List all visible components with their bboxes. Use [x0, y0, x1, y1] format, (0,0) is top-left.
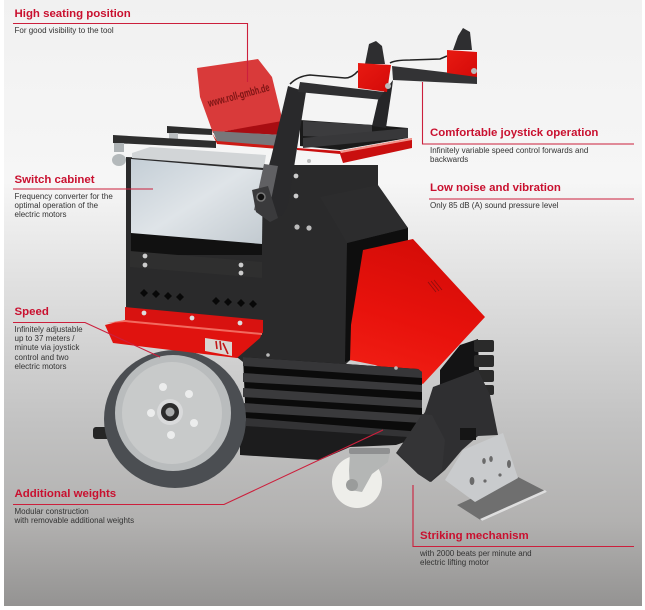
bolts on plates	[266, 353, 398, 370]
callout: speed: control and two	[14, 353, 69, 362]
callout: low noise and vibration: Only 85 dB (A) sound pressure level	[430, 201, 559, 210]
callout: speed: minute via joystick	[14, 343, 80, 352]
callout: comfortable joystick operation	[422, 82, 634, 164]
callout: high seating position: For good visibility to the tool	[14, 26, 114, 35]
callout: speed: Infinitely adjustable	[14, 325, 83, 334]
callout: striking mechanism: with 2000 beats per minute and	[419, 549, 532, 558]
seat support arm	[252, 86, 311, 222]
callout: speed	[13, 306, 160, 371]
callout: comfortable joystick operation: Infinitely variable speed control forwards and	[430, 146, 588, 155]
callout: low noise and vibration: Low noise and vibration	[430, 182, 561, 194]
lower chassis	[240, 420, 422, 460]
callout: comfortable joystick operation: backwards	[430, 155, 468, 164]
rear stacked weights	[440, 339, 494, 400]
callout: switch cabinet: optimal operation of the	[14, 201, 99, 210]
callout: striking mechanism	[413, 485, 634, 567]
callout: speed: electric motors	[14, 362, 67, 371]
side handle	[93, 427, 111, 439]
callout: additional weights	[13, 430, 383, 525]
red motor housing	[350, 239, 485, 384]
rear frame	[396, 370, 498, 482]
main black body	[126, 157, 408, 365]
callout: high seating position: High seating position	[14, 8, 131, 20]
callout: striking mechanism: Striking mechanism	[420, 530, 529, 542]
machine illustration	[93, 28, 547, 521]
callout: additional weights: Additional weights	[14, 488, 116, 500]
seat: www.roll-gmbh.de	[206, 82, 271, 109]
callout: low noise and vibration	[429, 182, 634, 210]
red front bracket	[105, 307, 263, 358]
rear handle bars	[112, 126, 216, 166]
striking plate	[445, 433, 547, 521]
callout: additional weights: Modular construction	[14, 507, 89, 516]
joystick right	[447, 28, 477, 77]
callout: switch cabinet: electric motors	[14, 210, 67, 219]
seat	[197, 59, 283, 149]
swivel caster	[332, 448, 390, 508]
ventilation holes	[140, 289, 257, 308]
callout: comfortable joystick operation: Comfortable joystick operation	[430, 127, 598, 139]
callout: striking mechanism: electric lifting motor	[420, 558, 489, 567]
callout: switch cabinet	[13, 174, 153, 219]
additional weight plates	[243, 357, 422, 438]
callout: additional weights: with removable additional weights	[14, 516, 134, 525]
drive wheel	[104, 350, 246, 488]
callout: switch cabinet: Frequency converter for the	[14, 192, 113, 201]
callout: high seating position	[13, 8, 248, 82]
callout: speed: Speed	[14, 306, 49, 318]
cabinet lower brackets	[130, 224, 312, 278]
joystick bar and cables	[290, 56, 477, 128]
callout: speed: up to 37 meters /	[14, 334, 75, 343]
callout: switch cabinet: Switch cabinet	[14, 174, 95, 186]
joystick left	[358, 41, 391, 92]
maker badge	[205, 338, 232, 356]
switch cabinet	[131, 147, 266, 244]
operator platform	[297, 120, 412, 163]
